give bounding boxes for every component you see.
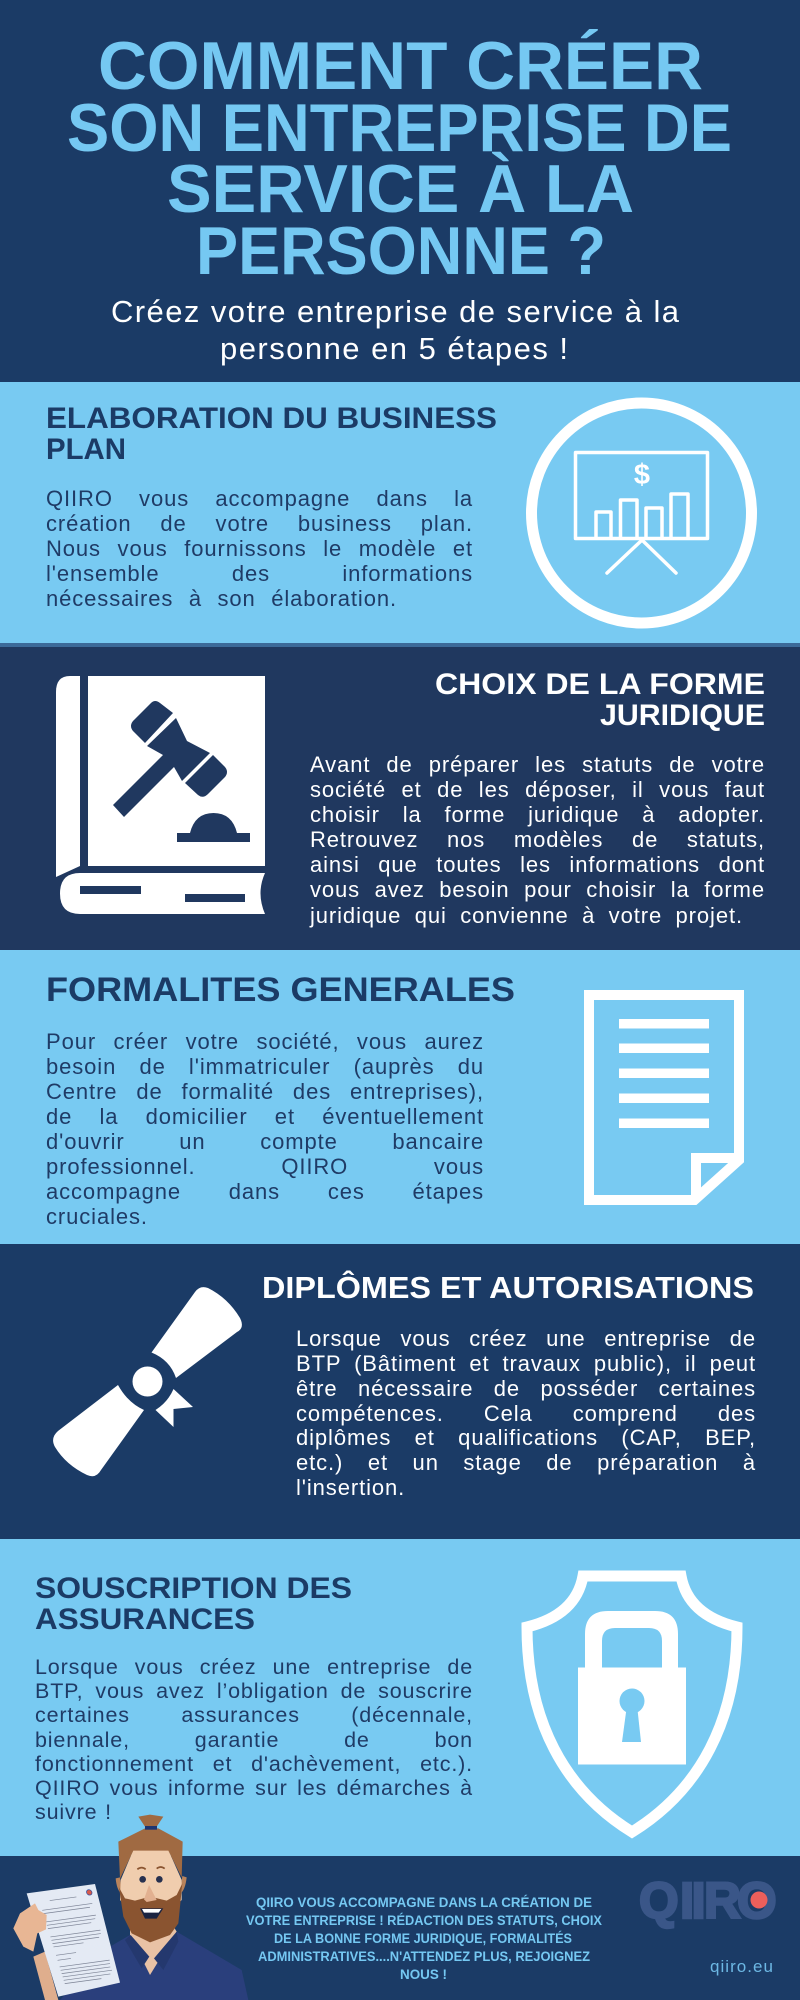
heading: choix de la forme juridique [435, 668, 765, 732]
text block: diplomes: diplômes et qualifications (CAP, BEP, [296, 1425, 756, 1450]
text block: formalites [46, 1029, 484, 1229]
text block: souscription: certaines assurances (décennale, [35, 1703, 473, 1727]
panel: elaboration du business plan [0, 382, 800, 647]
title: COMMENT CRÉER [98, 28, 703, 104]
text block: souscription: Lorsque vous créez une entreprise de [35, 1655, 473, 1679]
footer text: QIIRO VOUS ACCOMPAGNE DANS LA CRÉATION DE [256, 1895, 592, 1910]
text block: diplomes: l'insertion. [296, 1475, 405, 1500]
footer text: VOTRE ENTREPRISE ! RÉDACTION DES STATUTS, CHOIX [246, 1913, 602, 1928]
heading: elaboration du business plan [46, 402, 497, 466]
text block: formalites: de la domicilier et éventuellement [46, 1104, 484, 1129]
heading: souscription des assurances: SOUSCRIPTION DES [35, 1572, 352, 1605]
text block: choix: choisir la forme juridique à adopter. [310, 802, 765, 827]
panel: diplomes et autorisations [0, 1244, 800, 1539]
title: SON ENTREPRISE DE [67, 90, 732, 166]
heading: souscription des assurances [35, 1572, 352, 1636]
icon: shield with padlock [527, 1576, 737, 1832]
icon: presentation board in circle: $ [634, 459, 650, 491]
panel: choix de la forme juridique [0, 647, 800, 950]
heading: choix de la forme juridique: JURIDIQUE [600, 699, 765, 732]
website link text: qiiro.eu [710, 1957, 773, 1976]
text block: souscription: BTP, vous avez l’obligation de souscrire [35, 1679, 473, 1703]
text block: choix: juridique qui convienne à votre projet. [310, 903, 743, 928]
heading: diplomes et autorisations: DIPLÔMES ET AUTORISATIONS [262, 1269, 754, 1305]
text block: diplomes: compétences. Cela comprend des [296, 1401, 756, 1426]
subtitle [111, 294, 680, 366]
icon: presentation board in circle [532, 403, 752, 623]
icon: law book with gavel [56, 676, 265, 914]
subtitle: Créez votre entreprise de service à la [111, 294, 680, 329]
text block: souscription [35, 1655, 473, 1824]
footer text: ADMINISTRATIVES....N'ATTENDEZ PLUS, REJOIGNEZ [258, 1949, 590, 1964]
text block: formalites: Centre de formalité des entreprises), [46, 1079, 484, 1104]
text block: diplomes: BTP (Bâtiment et travaux public), il peut [296, 1351, 756, 1376]
text block: formalites: cruciales. [46, 1204, 148, 1229]
heading: choix de la forme juridique: CHOIX DE LA FORME [435, 668, 765, 701]
text block: choix: vous avez besoin pour choisir la forme [310, 877, 765, 902]
text block: souscription: biennale, garantie de bon [35, 1728, 473, 1752]
text block: elaboration: Nous vous fournissons le modèle et [46, 536, 473, 561]
text block: diplomes: etc.) et un stage de préparation à [296, 1450, 756, 1475]
text block: souscription: QIIRO vous informe sur les démarches à [35, 1776, 473, 1800]
subtitle: personne en 5 étapes ! [220, 331, 568, 366]
footer text: NOUS ! [400, 1967, 447, 1982]
heading: elaboration du business plan: PLAN [46, 433, 126, 466]
text block: choix: ainsi que toutes les informations dont [310, 852, 765, 877]
logo: QIIRO: QIIRO [639, 1872, 777, 1929]
text block: choix: Retrouvez nos modèles de statuts, [310, 827, 765, 852]
footer text: DE LA BONNE FORME JURIDIQUE, FORMALITÉS [274, 1931, 572, 1946]
text block: choix: Avant de préparer les statuts de votre [310, 752, 765, 777]
title: PERSONNE ? [196, 213, 606, 289]
illustration: bearded man holding a document [13, 1814, 248, 2000]
text block: diplomes: être nécessaire de posséder certaines [296, 1376, 756, 1401]
title: SERVICE À LA [167, 151, 634, 227]
text block: souscription: suivre ! [35, 1800, 112, 1824]
text block: souscription: fonctionnement et d'achèvement, etc.). [35, 1752, 473, 1776]
panel: footer [0, 1856, 800, 2000]
text block: elaboration: l'ensemble des informations [46, 561, 473, 586]
text block: elaboration: QIIRO vous accompagne dans la [46, 486, 473, 511]
text block: elaboration: nécessaires à son élaboration. [46, 586, 397, 611]
text block: formalites: professionnel. QIIRO vous [46, 1154, 484, 1179]
panel: souscription des assurances [0, 1539, 800, 1856]
text block: formalites: accompagne dans ces étapes [46, 1179, 484, 1204]
heading: souscription des assurances: ASSURANCES [35, 1603, 255, 1636]
heading: elaboration du business plan: ELABORATION DU BUSINESS [46, 402, 497, 435]
text block: choix: société et de les déposer, il vous faut [310, 777, 765, 802]
footer text [246, 1895, 602, 1982]
text block: formalites: d'ouvrir un compte bancaire [46, 1129, 484, 1154]
heading: formalites generales: FORMALITES GENERALES [46, 971, 515, 1009]
icon: document [589, 995, 740, 1200]
text block: formalites: besoin de l'immatriculer (auprès du [46, 1054, 484, 1079]
text block: diplomes: Lorsque vous créez une entreprise de [296, 1326, 756, 1351]
text block: diplomes [296, 1326, 756, 1500]
text block: formalites: Pour créer votre société, vous aurez [46, 1029, 484, 1054]
title [67, 28, 732, 289]
text block: choix [309, 752, 765, 928]
text block: elaboration: création de votre business plan. [46, 511, 473, 536]
panel: formalites generales [0, 950, 800, 1244]
panel: header [0, 0, 800, 382]
icon: diploma scroll [53, 1287, 242, 1476]
text block: elaboration [46, 486, 473, 611]
